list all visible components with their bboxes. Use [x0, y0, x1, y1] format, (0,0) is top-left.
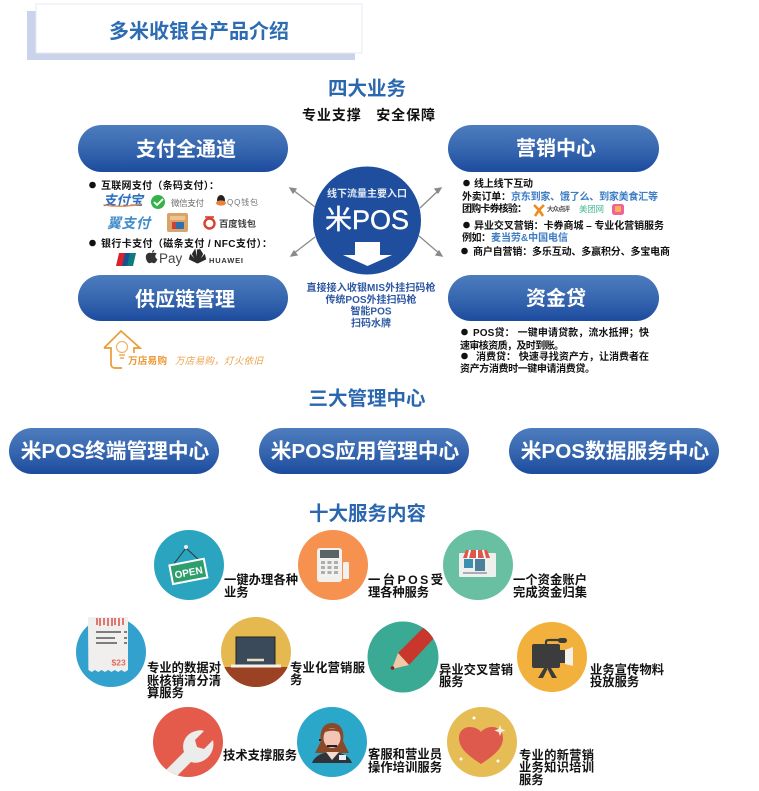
- text: 专业的数据对: [147, 660, 221, 675]
- arrows from central circle: [290, 188, 442, 256]
- logo: dianping: [534, 204, 570, 216]
- panel: marketing details: [461, 177, 670, 258]
- service 2: POS terminal: [298, 530, 443, 600]
- panel: payment methods: 银行卡支付（磁条支付 / NFC支付）：: [101, 237, 272, 250]
- service 8: tech support: [153, 707, 297, 777]
- text: 专业化营销服: [290, 660, 366, 675]
- text: [590, 662, 665, 689]
- panel: loan details: 资产方消费时一键申请消费贷。: [460, 362, 595, 375]
- service 3: store account: [443, 530, 587, 600]
- service 5: marketing laptop: [221, 617, 366, 687]
- text: [147, 660, 221, 700]
- text: 业务: [224, 584, 249, 600]
- pill: terminal management: [9, 428, 219, 474]
- panel: marketing details: 团购卡券核验：: [462, 202, 527, 215]
- panel: payment methods: [89, 179, 272, 266]
- text: 算服务: [147, 685, 184, 700]
- logo: alipay: 支付宝: [103, 193, 144, 208]
- logo: wechat pay: [151, 195, 204, 209]
- text: 务: [290, 672, 302, 687]
- central circle: mi POS: 线下流量主要入口: [327, 187, 407, 200]
- logo: apple pay: Pay: [159, 251, 183, 266]
- logo: wechat pay: 微信支付: [171, 198, 204, 208]
- heading: ten services: 十大服务内容: [309, 502, 426, 525]
- text: 完成资金归集: [513, 584, 587, 600]
- pill: marketing center: [448, 125, 659, 172]
- title banner: 多米收银台产品介绍: [109, 19, 289, 43]
- text: 理各种服务: [368, 584, 429, 600]
- pill: payment channels: 支付全通道: [136, 137, 236, 161]
- icon: open sign: [154, 530, 224, 600]
- logo: apple pay: [146, 250, 183, 266]
- service 6: cross-industry pencil: [368, 622, 513, 692]
- text: 业务宣传物料: [590, 662, 665, 677]
- central circle: mi POS: 米POS: [325, 205, 409, 235]
- logo: wandian yigou supply chain: [104, 331, 264, 368]
- icon: store card: [443, 530, 513, 600]
- text: [368, 572, 443, 600]
- text: [513, 572, 587, 600]
- arrow: to payment: [290, 188, 315, 207]
- heading: three management centers: 三大管理中心: [308, 387, 426, 410]
- text: POS access modes: 智能POS: [350, 304, 392, 318]
- icon: receipt: [76, 617, 146, 687]
- panel: loan details: [460, 326, 649, 375]
- service 7: video camera: [517, 622, 665, 692]
- service 9: customer service: [297, 707, 442, 777]
- panel: marketing details: 商户自营销：多乐互动、多赢积分、多宝电商: [473, 245, 670, 258]
- text: [290, 660, 366, 687]
- pill: app management: 米POS应用管理中心: [271, 439, 460, 463]
- panel: marketing details: 外卖订单：: [462, 190, 511, 203]
- panel: marketing details: 线上线下互动: [474, 177, 533, 190]
- icon: wrench: [153, 707, 223, 777]
- central circle: mi POS: [313, 166, 421, 274]
- icon: camera: [517, 622, 587, 692]
- service 1: open sign: [154, 530, 298, 600]
- logo: wandian yigou supply chain: 万店易购: [128, 354, 167, 367]
- icon: open sign: OPEN: [174, 565, 204, 581]
- logo: meituan: 美团网: [579, 204, 604, 214]
- text: 服务: [519, 772, 544, 787]
- pill: supply chain: 供应链管理: [135, 287, 235, 311]
- logo: unionpay: [116, 253, 136, 266]
- logo: bestpay: 翼支付: [107, 215, 152, 231]
- logo: huawei: HUAWEI: [209, 256, 243, 265]
- pill: marketing center: 营销中心: [516, 137, 596, 160]
- text: POS access modes: 扫码水牌: [351, 316, 391, 330]
- logo: qq wallet: [216, 195, 258, 207]
- logo: baidu wallet: 百度钱包: [219, 218, 257, 229]
- arrow: to marketing: [420, 188, 441, 208]
- icon: laptop: [221, 617, 291, 687]
- text: 一台POS受: [368, 572, 443, 587]
- logo: card wallet: [167, 213, 188, 232]
- pill: capital loans: [448, 275, 659, 321]
- panel: payment methods: 互联网支付（条码支付）：: [101, 179, 219, 192]
- panel: loan details: 速审核资质，及时到账。: [460, 339, 564, 352]
- title banner: [27, 4, 362, 60]
- heading: four businesses: 四大业务: [328, 78, 406, 100]
- panel: loan details: POS贷： 一键申请贷款，流水抵押；快: [473, 326, 649, 339]
- text: 技术支撑服务: [223, 748, 297, 762]
- icon: heart: [447, 707, 517, 777]
- icon: pencil: [368, 622, 438, 692]
- text: 一键办理各种: [224, 572, 298, 587]
- arrow: to capital loans: [419, 236, 442, 256]
- panel: marketing details: 异业交叉营销：卡券商城 – 专业化营销服务: [474, 219, 664, 232]
- text: 账核销清分清: [147, 673, 221, 688]
- text: [519, 748, 594, 787]
- text: [368, 746, 442, 774]
- text: 业务知识培训: [519, 760, 594, 774]
- logo: wandian yigou supply chain: 万店易购，灯火依旧: [175, 356, 264, 367]
- panel: loan details: 消费贷： 快速寻找资产方，让消费者在: [476, 350, 649, 363]
- logo: baidu wallet: [204, 217, 257, 229]
- text: 服务: [439, 674, 464, 689]
- text: POS access modes: 传统POS外挂扫码枪: [325, 293, 417, 306]
- text: 一个资金账户: [513, 572, 587, 587]
- pill: supply chain: [78, 275, 288, 321]
- text: POS access modes: [306, 281, 436, 330]
- icon: headset agent: [297, 707, 367, 777]
- icon: POS terminal: [298, 530, 368, 600]
- text: 投放服务: [590, 674, 639, 689]
- pill: app management: [259, 428, 469, 474]
- text: 专业的新营销: [519, 748, 594, 762]
- pill: data services: 米POS数据服务中心: [521, 440, 710, 463]
- icon: receipt: $23: [112, 658, 126, 668]
- subheading: 专业支撑 安全保障: [302, 107, 435, 123]
- pill: capital loans: 资金贷: [526, 286, 586, 310]
- text: 操作培训服务: [368, 760, 442, 774]
- text: 异业交叉营销: [439, 662, 513, 677]
- pill: data services: [509, 428, 719, 474]
- text: 客服和营业员: [368, 746, 442, 762]
- text: POS access modes: 直接接入收银MIS外挂扫码枪: [306, 281, 436, 294]
- logo: qq wallet: QQ钱包: [227, 197, 258, 207]
- arrow: to supply chain: [291, 237, 315, 256]
- service 10: new marketing knowledge: [447, 707, 594, 787]
- panel: marketing details: 例如：: [462, 231, 491, 244]
- pill: payment channels: [78, 125, 288, 172]
- icon: down arrow: [343, 242, 392, 266]
- logo: dianping: 大众点评: [547, 204, 570, 213]
- logo: huawei: [190, 250, 243, 265]
- panel: marketing details: 麦当劳&中国电信: [491, 231, 568, 244]
- text: [439, 662, 513, 689]
- pill: terminal management: 米POS终端管理中心: [21, 440, 210, 463]
- logo: pink app: [612, 204, 624, 215]
- text: [224, 572, 298, 600]
- panel: marketing details: 京东到家、饿了么、到家美食汇等: [511, 190, 658, 203]
- service 4: reconciliation receipt: [76, 617, 221, 700]
